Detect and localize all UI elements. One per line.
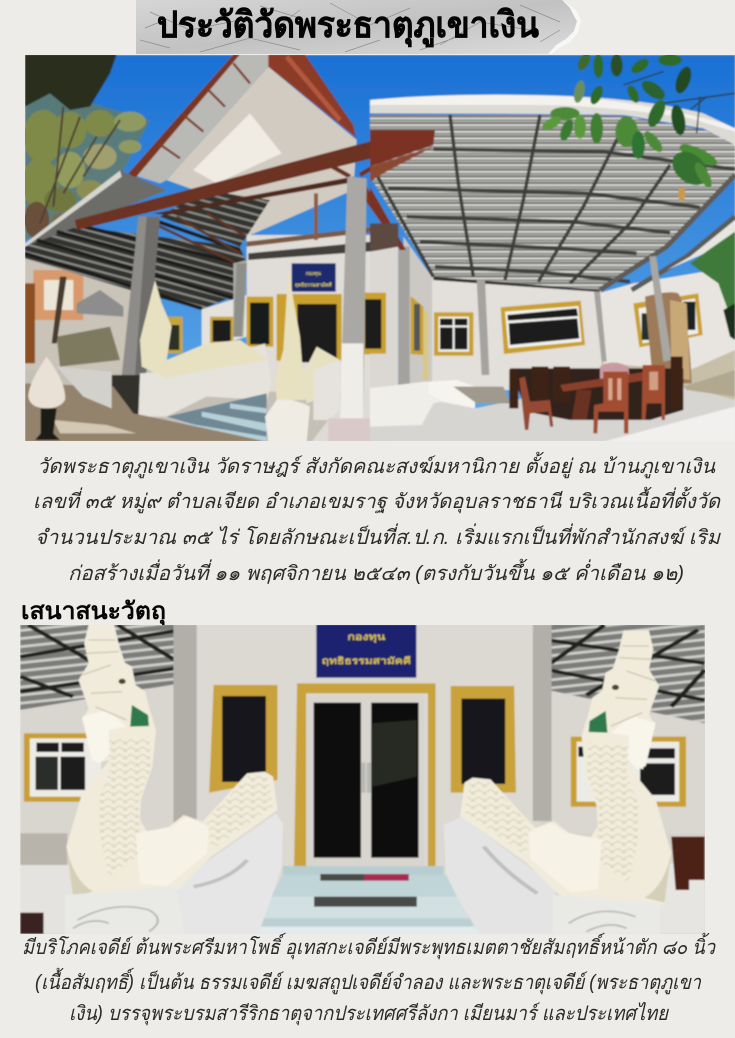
sign board — [316, 624, 416, 678]
tree behind the right corner — [690, 231, 735, 309]
left metal roof — [20, 624, 180, 710]
right metal roof — [548, 624, 705, 723]
double door with gold frame — [294, 683, 436, 874]
right half of the hall: metal roof, wall, windows, dining set — [370, 51, 735, 442]
intro paragraph: จำนวนประมาณ ๓๕ ไร่ โดยลักษณะเป็นที่ส.ป.ก. เริ่มแรกเป็นที่พักสำนักสงฆ์ เริม — [35, 523, 722, 549]
intro paragraph: วัดพระธาตุภูเขาเงิน วัดราษฎร์ สังกัดคณะสงฆ์มหานิกาย ตั้งอยู่ ณ บ้านภูเขาเงิน — [37, 451, 716, 479]
dining table and chairs — [509, 357, 683, 433]
intro paragraph — [33, 451, 722, 585]
side windows — [24, 733, 686, 807]
caption paragraph: เงิน) บรรจุพระบรมสารีริกธาตุจากประเทศศรีลังกา เมียนมาร์ และประเทศไทย — [69, 1002, 669, 1026]
intro paragraph: ก่อสร้างเมื่อวันที่ ๑๑ พฤศจิกายน ๒๕๔๓ (ตรงกับวันขึ้น ๑๕ ค่ำเดือน ๑๒) — [68, 558, 684, 585]
right naga — [460, 630, 671, 934]
section heading: เสนาสนะวัตถุ — [21, 598, 166, 627]
left half of the hall: gable, porch, naga stairs — [22, 54, 390, 442]
table at right — [671, 837, 705, 890]
foliage hanging into the frame — [540, 51, 735, 201]
intro paragraph: เลขที่ ๓๕ หมู่๙ ตำบลเจียด อำเภอเขมราฐ จังหวัดอุบลราชธานี บริเวณเนื้อที่ตั้งวัด — [33, 486, 721, 514]
front steps and mats — [254, 866, 479, 934]
windows flanking door — [209, 685, 516, 793]
photo: temple hall exterior — [22, 51, 735, 442]
sign board: กองทุน — [347, 632, 386, 643]
title banner: marble strip with heading: ประวัติวัดพระธาตุภูเขาเงิน — [157, 4, 539, 48]
caption paragraph — [22, 932, 717, 1026]
left naga — [65, 624, 278, 934]
photo: entrance with naga stairs — [20, 624, 706, 934]
sign board: ฤทธิธรรมสามัคคี — [322, 656, 411, 667]
stair walls — [171, 813, 560, 934]
left half of the hall: gable, porch, naga stairs: กองทุน — [306, 271, 321, 277]
left half of the hall: gable, porch, naga stairs: ฤทธิธรรมสามัคคี — [295, 282, 332, 289]
